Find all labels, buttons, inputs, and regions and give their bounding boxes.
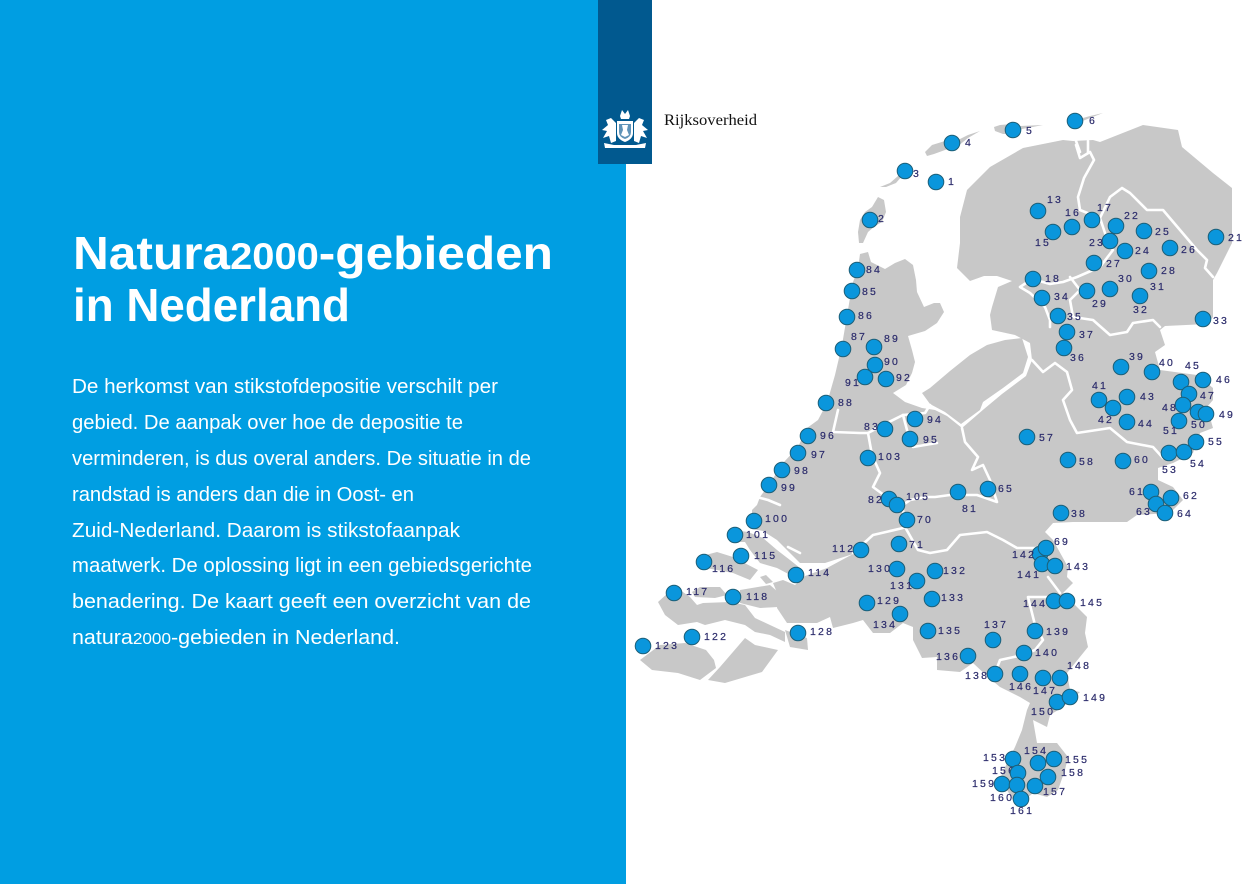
marker 139 — [1027, 623, 1070, 639]
marker 16 — [1064, 207, 1081, 235]
mainland — [752, 125, 1232, 807]
marker 122 — [684, 629, 728, 645]
marker 84: 84 — [866, 264, 882, 276]
intro text block: De herkomst van stikstofdepositie verschilt per — [72, 376, 498, 398]
marker 3 — [897, 163, 921, 180]
marker 142: 142 — [1012, 549, 1036, 561]
logo wordmark: Rijksoverheid — [664, 112, 757, 129]
marker 137 — [984, 619, 1008, 648]
marker 30 — [1102, 273, 1134, 297]
marker 23: 23 — [1089, 237, 1105, 249]
marker 71: 71 — [909, 539, 925, 551]
marker 18 — [1025, 271, 1061, 287]
marker 81: 81 — [962, 503, 978, 515]
marker 13 — [1030, 194, 1063, 219]
marker 147 — [1033, 670, 1057, 697]
marker 31 and 32: 32 — [1133, 304, 1149, 316]
icon: coat of arms — [602, 110, 648, 148]
marker 99: 99 — [781, 482, 797, 494]
marker 103 — [860, 450, 902, 466]
marker 83 — [864, 421, 893, 437]
intro text block: benadering. De kaart geeft een overzicht van de — [72, 591, 531, 613]
marker 47 — [1181, 386, 1216, 402]
marker 46 — [1195, 372, 1232, 388]
marker 21 — [1208, 229, 1244, 245]
marker 17 — [1084, 202, 1113, 228]
marker 22: 22 — [1124, 210, 1140, 222]
marker 61: 61 — [1129, 486, 1145, 498]
marker 158 — [1040, 767, 1085, 785]
marker 91 — [845, 369, 873, 389]
marker 144: 144 — [1023, 598, 1047, 610]
marker 2: 2 — [878, 213, 886, 225]
marker 62: 62 — [1183, 490, 1199, 502]
marker 70: 70 — [917, 514, 933, 526]
marker 18: 18 — [1045, 273, 1061, 285]
marker 49 — [1198, 406, 1235, 422]
marker 62 — [1163, 490, 1199, 506]
marker 58: 58 — [1079, 456, 1095, 468]
title — [73, 227, 553, 331]
marker 27: 27 — [1106, 258, 1122, 270]
marker 155 — [1046, 751, 1089, 767]
marker 88 — [818, 395, 854, 411]
marker 21: 21 — [1228, 232, 1244, 244]
marker 149 — [1062, 689, 1107, 705]
marker 82 — [868, 491, 897, 507]
marker 143 — [1047, 558, 1090, 574]
Flevoland — [922, 338, 1028, 424]
marker 157 — [1027, 778, 1067, 798]
marker 45: 45 — [1185, 360, 1201, 372]
marker 146 — [1009, 666, 1033, 693]
marker 128: 128 — [810, 626, 834, 638]
intro text block: gebied. De aanpak over hoe de depositie te — [72, 412, 463, 434]
marker 37 — [1059, 324, 1095, 341]
title: in Nederland — [73, 279, 350, 331]
intro text block: randstad is anders dan die in Oost- en — [72, 484, 414, 506]
marker 92 — [878, 371, 912, 387]
marker 101: 101 — [746, 529, 770, 541]
marker 51 — [1163, 413, 1187, 437]
marker 16: 16 — [1065, 207, 1081, 219]
marker 24: 24 — [1135, 245, 1151, 257]
marker 26: 26 — [1181, 244, 1197, 256]
marker 129: 129 — [877, 595, 901, 607]
marker 13: 13 — [1047, 194, 1063, 206]
marker 35: 35 — [1067, 311, 1083, 323]
marker 87: 87 — [851, 331, 867, 343]
marker 97 — [790, 445, 827, 461]
marker 141 — [1017, 556, 1050, 581]
marker 136: 136 — [936, 651, 960, 663]
marker 130 — [868, 561, 905, 577]
marker 50 — [1190, 404, 1207, 431]
marker 70 — [899, 512, 933, 528]
marker 64: 64 — [1177, 508, 1193, 520]
marker 61 — [1129, 484, 1159, 500]
marker 115 — [733, 548, 777, 564]
marker 39: 39 — [1129, 351, 1145, 363]
marker 146: 146 — [1009, 681, 1033, 693]
marker 34: 34 — [1054, 291, 1070, 303]
marker 130: 130 — [868, 563, 892, 575]
marker 4: 4 — [965, 137, 973, 149]
marker 92: 92 — [896, 372, 912, 384]
intro text block: natura 2000-gebieden in Nederland. — [72, 627, 400, 649]
marker 36 — [1056, 340, 1086, 364]
marker 65: 65 — [998, 483, 1014, 495]
marker 118: 118 — [746, 591, 769, 603]
marker 156: 156 — [992, 765, 1016, 777]
marker 105: 105 — [906, 491, 930, 503]
marker 95 — [902, 431, 939, 447]
marker 85: 85 — [862, 286, 878, 298]
marker 43 — [1119, 389, 1156, 405]
marker 40: 40 — [1159, 357, 1175, 369]
marker 144 — [1023, 593, 1062, 610]
marker 60: 60 — [1134, 454, 1150, 466]
marker 24 — [1117, 243, 1151, 259]
marker 30: 30 — [1118, 273, 1134, 285]
marker 87 — [835, 331, 867, 357]
panel: blue text column — [0, 0, 626, 884]
Delta islands — [640, 530, 808, 683]
marker 53 — [1161, 445, 1178, 476]
marker 112 — [832, 542, 869, 558]
marker 55: 55 — [1208, 436, 1224, 448]
marker 159 — [972, 776, 1010, 792]
marker 138: 138 — [965, 670, 989, 682]
marker 22 — [1108, 210, 1140, 234]
marker 90 — [867, 356, 900, 373]
marker 103: 103 — [878, 451, 902, 463]
marker 131 — [890, 573, 925, 592]
marker 65 — [980, 481, 1014, 497]
marker 156 — [992, 765, 1026, 781]
marker 31 and 32 — [1132, 281, 1166, 316]
marker 49: 49 — [1219, 409, 1235, 421]
marker 44: 44 — [1138, 418, 1154, 430]
marker 143: 143 — [1066, 561, 1090, 573]
marker 64 — [1157, 505, 1193, 521]
title: Natura 2000-gebieden — [73, 227, 553, 279]
marker 89: 89 — [884, 333, 900, 345]
marker 31 and 32: 31 — [1150, 281, 1166, 293]
marker 97: 97 — [811, 449, 827, 461]
marker 133: 133 — [941, 592, 965, 604]
marker 138 — [965, 666, 1003, 682]
marker 128 — [790, 625, 834, 641]
marker 84 — [849, 262, 882, 278]
marker 139: 139 — [1046, 626, 1070, 638]
marker 116 — [696, 554, 735, 575]
marker 95: 95 — [923, 434, 939, 446]
marker 71 — [891, 536, 925, 552]
marker 115: 115 — [754, 550, 777, 562]
marker 145 — [1059, 593, 1104, 609]
marker 160: 160 — [990, 792, 1014, 804]
marker 81 — [950, 484, 978, 515]
marker 99 — [761, 477, 797, 494]
marker 112: 112 — [832, 543, 855, 555]
marker 141: 141 — [1017, 569, 1041, 581]
marker 6 — [1067, 113, 1097, 129]
marker 41 — [1091, 380, 1108, 408]
marker 2 — [862, 212, 886, 228]
marker 148 — [1052, 660, 1091, 686]
marker 86: 86 — [858, 310, 874, 322]
marker 123: 123 — [655, 640, 679, 652]
marker 47: 47 — [1200, 390, 1216, 402]
marker 4 — [944, 135, 973, 151]
marker 89 — [866, 333, 900, 355]
marker 57: 57 — [1039, 432, 1055, 444]
marker 33 — [1195, 311, 1229, 327]
marker 145: 145 — [1080, 597, 1104, 609]
marker 90: 90 — [884, 356, 900, 368]
marker 46: 46 — [1216, 374, 1232, 386]
marker 17: 17 — [1097, 202, 1113, 214]
marker 116: 116 — [712, 563, 735, 575]
marker 38: 38 — [1071, 508, 1087, 520]
marker 100: 100 — [765, 513, 789, 525]
marker 54: 54 — [1190, 458, 1206, 470]
marker 135: 135 — [938, 625, 962, 637]
marker 1 — [928, 174, 956, 190]
marker 15: 15 — [1035, 237, 1051, 249]
marker 132: 132 — [943, 565, 967, 577]
marker 25: 25 — [1155, 226, 1171, 238]
marker 23 — [1089, 233, 1118, 249]
marker 60 — [1115, 453, 1150, 469]
marker 57 — [1019, 429, 1055, 445]
marker 27 — [1086, 255, 1122, 271]
marker 54 — [1176, 444, 1206, 470]
marker 133 — [924, 591, 965, 607]
marker 36: 36 — [1070, 352, 1086, 364]
marker 82: 82 — [868, 494, 884, 506]
marker 88: 88 — [838, 397, 854, 409]
marker 37: 37 — [1079, 329, 1095, 341]
marker 15 — [1035, 224, 1061, 249]
marker 43: 43 — [1140, 391, 1156, 403]
marker 63 — [1136, 496, 1164, 518]
marker 83: 83 — [864, 421, 880, 433]
marker 42: 42 — [1098, 414, 1114, 426]
marker 44 — [1119, 414, 1154, 430]
marker 150: 150 — [1031, 706, 1055, 718]
marker 53: 53 — [1162, 464, 1178, 476]
marker 3: 3 — [913, 168, 921, 180]
marker 159: 159 — [972, 778, 996, 790]
marker 96 — [800, 428, 836, 444]
marker 63: 63 — [1136, 506, 1152, 518]
marker 34 — [1034, 290, 1070, 306]
marker 135 — [920, 623, 962, 639]
marker 148: 148 — [1067, 660, 1091, 672]
marker 55 — [1188, 434, 1224, 450]
marker 5 — [1005, 122, 1034, 138]
marker 153: 153 — [983, 752, 1007, 764]
marker 50: 50 — [1191, 419, 1207, 431]
marker 136 — [936, 648, 976, 664]
marker 101 — [727, 527, 770, 543]
markers — [635, 113, 1244, 817]
marker 114: 114 — [808, 567, 831, 579]
marker 69: 69 — [1054, 536, 1070, 548]
marker 132 — [927, 563, 967, 579]
marker 123 — [635, 638, 679, 654]
marker 38 — [1053, 505, 1087, 521]
marker 45 — [1173, 360, 1201, 390]
marker 85 — [844, 283, 878, 299]
marker 41: 41 — [1092, 380, 1108, 392]
marker 6: 6 — [1089, 115, 1097, 127]
marker 122: 122 — [704, 631, 728, 643]
marker 5: 5 — [1026, 125, 1034, 137]
marker 100 — [746, 513, 789, 529]
marker 26 — [1162, 240, 1197, 256]
marker 137: 137 — [984, 619, 1008, 631]
marker 140: 140 — [1035, 647, 1059, 659]
marker 25 — [1136, 223, 1171, 239]
marker 29 — [1079, 283, 1108, 310]
marker 94: 94 — [927, 414, 943, 426]
marker 153 — [983, 751, 1021, 767]
intro text block: verminderen, is dus overal anders. De situatie in de — [72, 448, 531, 470]
marker 140 — [1016, 645, 1059, 661]
marker 160 — [990, 777, 1025, 804]
marker 42 — [1098, 400, 1121, 426]
marker 131: 131 — [890, 580, 914, 592]
marker 40 — [1144, 357, 1175, 380]
marker 69 — [1038, 536, 1070, 556]
Wadden islands — [858, 113, 1103, 243]
marker 96: 96 — [820, 430, 836, 442]
marker 94 — [907, 411, 943, 427]
intro text block: Zuid-Nederland. Daarom is stikstofaanpak — [72, 520, 461, 542]
marker 29: 29 — [1092, 298, 1108, 310]
marker 58 — [1060, 452, 1095, 468]
logo band — [598, 0, 652, 164]
marker 134 — [873, 606, 908, 631]
marker 51: 51 — [1163, 425, 1179, 437]
marker 161: 161 — [1010, 805, 1034, 817]
map of the Netherlands — [640, 113, 1232, 807]
marker 48: 48 — [1162, 402, 1178, 414]
marker 98: 98 — [794, 465, 810, 477]
marker 142 — [1012, 546, 1048, 562]
marker 28: 28 — [1161, 265, 1177, 277]
marker 118 — [725, 589, 769, 605]
marker 154 — [1024, 745, 1048, 771]
marker 149: 149 — [1083, 692, 1107, 704]
intro text block: maatwerk. De oplossing ligt in een gebiedsgerichte — [72, 555, 532, 577]
marker 129 — [859, 595, 901, 611]
marker 91: 91 — [845, 377, 861, 389]
marker 155: 155 — [1065, 754, 1089, 766]
marker 117 — [666, 585, 709, 601]
marker 28 — [1141, 263, 1177, 279]
marker 147: 147 — [1033, 685, 1057, 697]
marker 98 — [774, 462, 810, 478]
intro text block — [72, 376, 532, 649]
marker 158: 158 — [1061, 767, 1085, 779]
marker 117: 117 — [686, 586, 709, 598]
marker 1: 1 — [948, 176, 956, 188]
marker 161 — [1010, 791, 1034, 817]
marker 157: 157 — [1043, 786, 1067, 798]
marker 35 — [1050, 308, 1083, 324]
marker 154: 154 — [1024, 745, 1048, 757]
marker 33: 33 — [1213, 315, 1229, 327]
marker 86 — [839, 309, 874, 325]
marker 114 — [788, 567, 831, 583]
marker 48 — [1162, 397, 1191, 414]
province borders and waterways — [753, 141, 1213, 668]
marker 134: 134 — [873, 619, 897, 631]
marker 39 — [1113, 351, 1145, 375]
marker 105 — [889, 491, 930, 513]
marker 150 — [1031, 694, 1065, 718]
